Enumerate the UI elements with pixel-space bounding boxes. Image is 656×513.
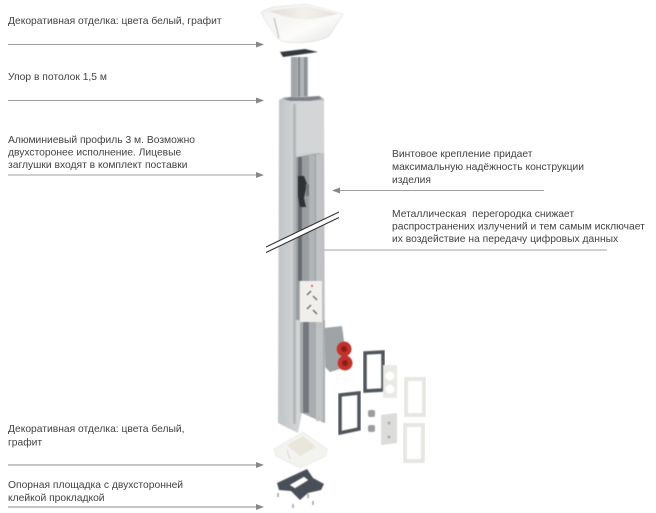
icon: aluminium column with window <box>278 96 325 433</box>
column window interior <box>296 153 320 320</box>
caption: screw fastening: максимальную надёжность конструкции <box>392 162 584 173</box>
caption: screw fastening: Винтовое крепление придает <box>392 149 533 160</box>
caption: metal partition: распространених излучений и тем самым исключает <box>392 222 645 232</box>
icon: dark support pad with screws <box>277 469 324 508</box>
icon: socket box with red sockets <box>324 326 352 372</box>
caption: aluminium profile: Алюминиевый профиль 3 м. Возможно <box>8 134 195 146</box>
arrow: support pad <box>8 504 264 510</box>
caption: bottom decorative trim: Декоративная отделка: цвета белый, <box>8 423 185 435</box>
icon: dark mounting plate <box>280 49 318 57</box>
icon: double socket plate <box>300 281 322 322</box>
icon: upper white frame <box>406 379 424 415</box>
caption: metal partition: их воздействие на передачу цифровых данных <box>392 233 619 245</box>
arrow: aluminium profile <box>8 172 264 178</box>
icon: lower white frame <box>405 425 423 461</box>
icon: bottom white trim <box>274 432 327 468</box>
icon: telescopic inner pole <box>291 57 308 98</box>
icon: small connectors <box>368 410 375 432</box>
icon: top white cap <box>261 4 343 43</box>
arrow: screw fastening <box>332 188 544 194</box>
icon: lower dark frame <box>340 393 359 433</box>
arrow: bottom trim <box>8 462 264 468</box>
caption: aluminium profile <box>8 134 195 171</box>
icon: screw fastening mechanism <box>298 176 309 207</box>
icon: lower blank plate <box>381 413 397 445</box>
caption: metal partition <box>392 209 645 245</box>
arrow: metal partition <box>313 248 607 252</box>
caption: support pad: Опорная площадка с двухсторонней <box>8 480 183 491</box>
caption: aluminium profile: двухсторонее исполнение. Лицевые <box>8 148 182 158</box>
caption: screw fastening <box>392 149 584 186</box>
column lower channel <box>300 320 325 423</box>
icon: break mark <box>266 212 339 252</box>
caption: bottom decorative trim: графит <box>8 436 42 448</box>
caption: bottom decorative trim <box>8 423 185 448</box>
icon: upper dark frame <box>365 352 383 391</box>
caption: ceiling stop: Упор в потолок 1,5 м <box>8 72 107 83</box>
arrow: top trim <box>8 42 264 48</box>
caption: support pad: клейкой прокладкой <box>8 493 105 504</box>
caption: support pad <box>8 480 183 504</box>
arrow: ceiling stop <box>8 98 264 104</box>
caption: metal partition: Металлическая перегородка снижает <box>392 209 574 220</box>
icon: upper double-hole plate <box>383 365 397 398</box>
caption: screw fastening: изделия <box>392 175 431 186</box>
caption: top decorative trim: Декоративная отделка: цвета белый, графит <box>8 15 222 27</box>
caption: aluminium profile: заглушки входят в комплект поставки <box>8 160 188 171</box>
